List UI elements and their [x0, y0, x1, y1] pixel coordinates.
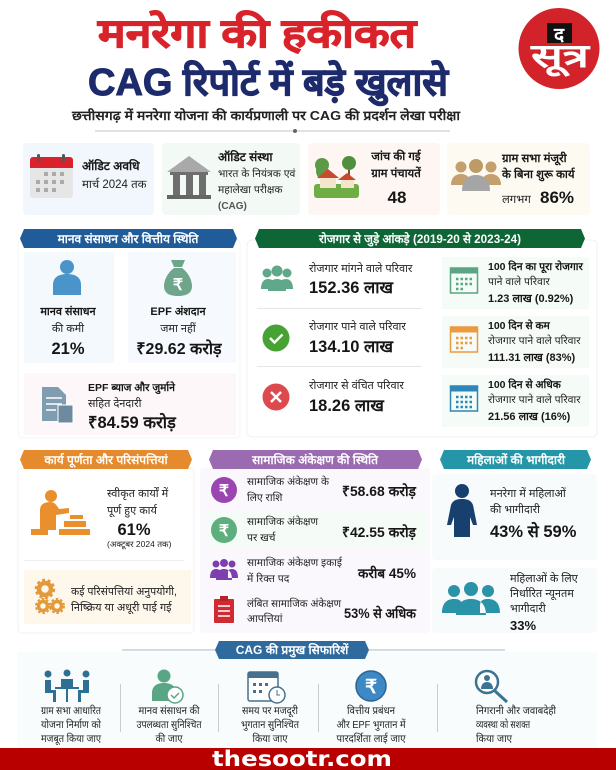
- text: work without gram sabha: 86%: [540, 188, 574, 207]
- text: work without gram sabha: के बिना शुरू कार्य: [501, 167, 576, 182]
- card: less than 100 days: 100 दिन से कम: [488, 319, 551, 332]
- text: women participation: 43% से 59%: [490, 521, 577, 541]
- card: unused assets: निष्क्रिय या अधूरी पाई गई: [71, 601, 173, 615]
- icon: money bag: ₹: [173, 277, 183, 294]
- row: households seeking work: [261, 262, 413, 297]
- recommendation: human resources: उपलब्धता सुनिश्चित: [136, 718, 202, 731]
- text: minimum participation: महिलाओं के लिए: [510, 572, 579, 585]
- icon: purple rupee: ₹: [219, 483, 229, 500]
- card: unused assets: कई परिसंपत्तियां अनुपयोगी,: [71, 585, 177, 598]
- recommendation: human resources: मानव संसाधन की: [138, 704, 200, 717]
- recommendation: monitoring: निगरानी और जवाबदेही: [476, 704, 556, 717]
- card: HR shortage: की कमी: [52, 322, 84, 335]
- row: vacant posts: करीब 45%: [357, 565, 416, 581]
- card: less than 100 days: रोजगार पाने वाले परिवार: [488, 334, 581, 347]
- panel: audit body: [162, 143, 300, 215]
- recommendation: financial management: [336, 671, 406, 745]
- panel: employment statistics: [247, 229, 597, 437]
- icon: woman: [447, 484, 477, 537]
- text: minimum participation: 33%: [510, 618, 536, 633]
- row: households seeking work: रोजगार मांगने वाले परिवार: [309, 262, 413, 275]
- row: pending objections: 53% से अधिक: [344, 605, 417, 621]
- card: EPF liability: EPF ब्याज और जुर्माने: [88, 381, 176, 395]
- recommendation: human resources: की जाए: [156, 732, 183, 745]
- icon: government building: [167, 156, 211, 199]
- text: minimum participation: निर्धारित न्यूनतम: [510, 587, 574, 601]
- row: households denied work: 18.26 लाख: [309, 397, 385, 415]
- icon: calendar with clock: [248, 672, 285, 703]
- row: households getting work: [262, 320, 406, 356]
- row: vacant posts: सामाजिक अंकेक्षण इकाई: [247, 556, 343, 569]
- text: work without gram sabha: [501, 151, 576, 207]
- card: EPF liability: सहित देनदारी: [88, 397, 142, 410]
- heading: human resources: [20, 229, 237, 248]
- row: households denied work: रोजगार से वंचित परिवार: [309, 379, 404, 392]
- text: completed works: स्वीकृत कार्यों में: [107, 487, 169, 500]
- card: more than 100 days: 100 दिन से अधिक: [488, 378, 562, 391]
- row: vacant posts: में रिक्त पद: [247, 572, 290, 585]
- card: more than 100 days: [442, 375, 589, 427]
- card: full 100 days: पाने वाले परिवार: [488, 275, 551, 288]
- panel: CAG recommendations: [17, 641, 597, 748]
- logo: the sootr: द: [553, 25, 565, 46]
- text: audit body: ऑडिट संस्था: [218, 150, 273, 164]
- panel: gram panchayats: [308, 143, 440, 215]
- heading: social audit: सामाजिक अंकेक्षण की स्थिति: [251, 453, 379, 467]
- recommendation: gram sabha: योजना निर्माण को: [41, 718, 101, 731]
- icon: purple rupee: [211, 477, 237, 503]
- row: social audit spend: पर खर्च: [247, 531, 276, 544]
- icon: meeting: [44, 670, 90, 702]
- row: social audit spend: [205, 512, 427, 548]
- card: EPF contribution: [128, 252, 236, 363]
- heading: work completion: कार्य पूर्णता और परिसंपत्तियां: [43, 453, 168, 468]
- card: full 100 days: 1.23 लाख (0.92%): [488, 293, 574, 305]
- panel: audit period: [23, 143, 154, 215]
- row: vacant posts: [210, 556, 416, 585]
- card: HR shortage: [24, 252, 114, 363]
- heading: employment: रोजगार से जुड़े आंकड़े (2019-20 से 2023-24): [318, 232, 521, 247]
- icon: orange calendar: [450, 327, 478, 352]
- card: HR shortage: मानव संसाधन: [39, 305, 97, 318]
- text: audit body: (CAG): [218, 201, 247, 212]
- card: EPF contribution: ₹29.62 करोड़: [136, 339, 223, 358]
- recommendation: gram sabha: [41, 670, 102, 745]
- text: audit body: [218, 150, 295, 212]
- subtitle: छत्तीसगढ़ में मनरेगा योजना की कार्यप्रणाली पर CAG की प्रदर्शन लेखा परीक्षा: [71, 108, 461, 123]
- recommendation: wage payment: [241, 672, 300, 745]
- icon: calendar: [30, 154, 73, 198]
- icon: red cross: [262, 384, 290, 410]
- card: full 100 days: [442, 257, 589, 309]
- icon: gears: [36, 580, 64, 613]
- row: households denied work: [262, 379, 404, 415]
- text: minimum participation: [510, 572, 579, 633]
- text: audit period: [82, 159, 147, 191]
- icon: green rupee: [211, 517, 237, 543]
- icon: purple people: [210, 559, 238, 580]
- text: completed works: 61%: [117, 521, 151, 539]
- panel: human resources and finance: [18, 229, 240, 438]
- card: more than 100 days: रोजगार पाने वाले परिवार: [488, 393, 581, 406]
- text: completed works: (अक्टूबर 2024 तक): [107, 539, 172, 550]
- text: gram panchayats: जांच की गई: [370, 149, 422, 163]
- recommendation: wage payment: भुगतान सुनिश्चित: [241, 718, 300, 731]
- card: unused assets: [24, 570, 191, 624]
- recommendation: financial management: और EPF भुगतान में: [336, 718, 406, 731]
- row: pending objections: आपत्तियां: [247, 612, 283, 625]
- row: households getting work: 134.10 लाख: [309, 338, 395, 356]
- panel: work completion and assets: [18, 450, 194, 633]
- icon: magnifier: [476, 671, 507, 702]
- icon: people: [261, 266, 293, 291]
- heading: recommendations: [215, 641, 369, 659]
- heading: work completion: [20, 450, 192, 469]
- card: less than 100 days: [442, 316, 589, 368]
- icon: green rupee: ₹: [219, 523, 229, 540]
- recommendation: wage payment: समय पर मजदूरी: [242, 704, 298, 718]
- recommendation: financial management: वित्तीय प्रबंधन: [347, 704, 395, 717]
- recommendation: monitoring: [476, 671, 556, 745]
- text: completed works: [107, 487, 172, 550]
- heading: recommendations: CAG की प्रमुख सिफारिशें: [236, 643, 349, 658]
- text: audit body: महालेखा परीक्षक: [218, 183, 283, 196]
- row: social audit amount: सामाजिक अंकेक्षण के: [247, 475, 330, 488]
- heading: employment: [255, 229, 585, 248]
- text: gram panchayats: [370, 149, 422, 207]
- row: social audit amount: लिए राशि: [247, 491, 283, 504]
- recommendation: gram sabha: मजबूत किया जाए: [41, 732, 101, 745]
- panel: work without gram sabha: [447, 143, 590, 215]
- icon: person: [53, 260, 81, 295]
- recommendation: monitoring: व्यवस्था को सशक्त: [476, 718, 531, 731]
- text: gram panchayats: 48: [388, 188, 406, 207]
- text: women participation: [490, 487, 577, 541]
- text: completed works: पूर्ण हुए कार्य: [107, 504, 158, 518]
- text: audit period: ऑडिट अवधि: [82, 159, 140, 173]
- text: gram panchayats: ग्राम पंचायतें: [370, 166, 422, 180]
- card: EPF contribution: EPF अंशदान: [150, 305, 206, 318]
- panel: women participation: [432, 450, 597, 633]
- recommendation: wage payment: किया जाए: [252, 732, 288, 745]
- icon: teal people: [442, 582, 500, 615]
- row: social audit amount: [211, 475, 417, 504]
- text: women participation: मनरेगा में महिलाओं: [490, 487, 566, 500]
- text: work without gram sabha: ग्राम सभा मंजूरी: [501, 151, 568, 166]
- icon: rupee coin: ₹: [365, 677, 377, 698]
- title: मनरेगा की हकीकत: [97, 10, 417, 56]
- row: households seeking work: 152.36 लाख: [309, 279, 395, 297]
- card: EPF liability: [24, 373, 236, 435]
- card: full 100 days: 100 दिन का पूरा रोजगार: [488, 260, 584, 274]
- row: pending objections: [214, 596, 417, 625]
- icon: green calendar: [450, 268, 478, 293]
- title: [88, 10, 449, 106]
- recommendation: financial management: पारदर्शिता लाई जाए: [336, 732, 406, 745]
- text: women participation: की भागीदारी: [490, 503, 540, 516]
- recommendation: gram sabha: ग्राम सभा आधारित: [41, 704, 102, 717]
- row: pending objections: लंबित सामाजिक अंकेक्षण: [247, 597, 341, 610]
- row: social audit amount: ₹58.68 करोड़: [342, 483, 417, 499]
- heading: women: [440, 450, 591, 469]
- logo: the sootr: [518, 8, 600, 89]
- card: EPF contribution: जमा नहीं: [160, 322, 196, 335]
- icon: blue calendar: [450, 386, 478, 411]
- icon: clipboard: [214, 596, 234, 623]
- icon: people group: [451, 159, 501, 191]
- text: work without gram sabha: लगभग: [502, 194, 531, 206]
- card: more than 100 days: 21.56 लाख (16%): [488, 411, 571, 423]
- icon: person with check: [152, 670, 183, 703]
- card: less than 100 days: 111.31 लाख (83%): [488, 352, 576, 364]
- icon: village houses: [314, 156, 359, 198]
- heading: social audit: [209, 450, 422, 469]
- row: social audit spend: सामाजिक अंकेक्षण: [247, 515, 318, 528]
- row: social audit spend: ₹42.55 करोड़: [342, 524, 417, 540]
- icon: document and calculator: [42, 387, 73, 423]
- text: minimum participation: भागीदारी: [510, 602, 546, 615]
- recommendation: monitoring: किया जाए: [476, 732, 512, 745]
- card: HR shortage: 21%: [51, 340, 85, 358]
- text: audit body: भारत के नियंत्रक एवं: [218, 167, 295, 180]
- row: households getting work: रोजगार पाने वाले परिवार: [309, 320, 406, 333]
- title: CAG रिपोर्ट में बड़े खुलासे: [88, 60, 449, 106]
- icon: green check: [262, 324, 290, 352]
- panel: social audit: [200, 450, 430, 633]
- recommendation: human resources: [136, 670, 202, 745]
- card: EPF liability: ₹84.59 करोड़: [88, 412, 177, 432]
- text: audit period: मार्च 2024 तक: [82, 177, 147, 191]
- footer: website: [0, 747, 616, 770]
- logo: the sootr: सूत्र: [530, 37, 592, 77]
- heading: human resources: मानव संसाधन और वित्तीय स्थिति: [57, 232, 200, 246]
- heading: women: महिलाओं की भागीदारी: [466, 453, 566, 467]
- icon: worker with bricks: [31, 490, 90, 535]
